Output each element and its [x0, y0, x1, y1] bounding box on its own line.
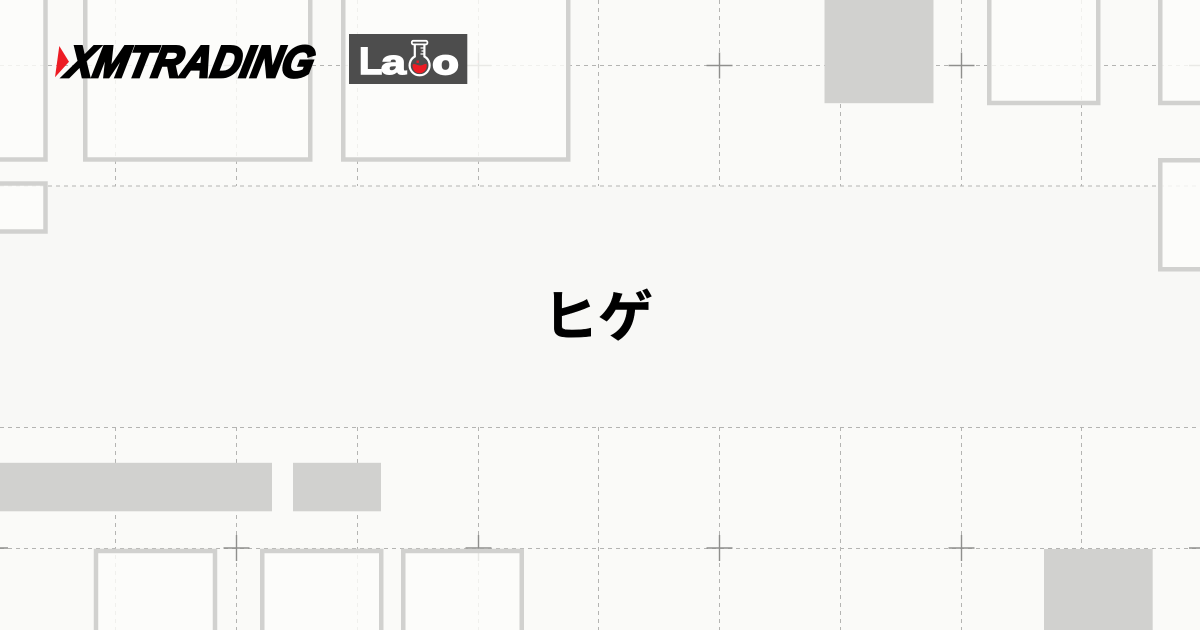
hollow candlesticks, bottom row	[96, 551, 522, 630]
logo wordmark: XMTRADING	[60, 36, 320, 87]
icon: flask	[410, 41, 430, 75]
logo letter o: o	[432, 44, 458, 82]
filled candlestick, top	[824, 0, 934, 103]
filled horizontal bar, long	[0, 463, 272, 511]
hollow candlesticks, middle row	[0, 160, 1200, 269]
hollow candlesticks, top row	[0, 0, 1200, 160]
logo letter L: L	[359, 41, 382, 83]
filled candlestick, bottom right	[1044, 549, 1153, 630]
Lab logo	[349, 34, 467, 84]
XMTRADING logo	[55, 36, 320, 87]
logo letter a: a	[381, 44, 407, 82]
icon: red logo triangle	[55, 46, 69, 77]
logo background	[349, 34, 467, 84]
filled horizontal bar, short	[293, 463, 381, 511]
title: ヒゲ	[543, 286, 653, 348]
